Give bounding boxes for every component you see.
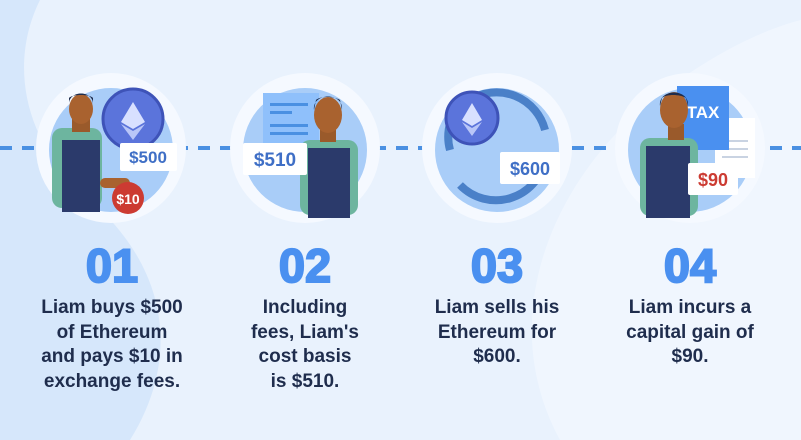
icon: cycle arrows	[448, 92, 545, 200]
text: step 4: capital gain of	[626, 322, 755, 343]
text: step 3	[435, 297, 559, 367]
icon: document	[263, 93, 319, 153]
price tag $90	[688, 163, 738, 195]
step 3 illustration	[422, 73, 572, 223]
text: step 4	[626, 297, 755, 367]
icon: documents	[715, 118, 755, 178]
icon: TAX sign	[677, 86, 729, 150]
fee badge $10	[112, 182, 144, 214]
step 4 illustration	[615, 73, 765, 223]
price tag $500: $500	[129, 148, 167, 167]
step number 03: 03	[471, 239, 523, 292]
icon: TAX sign: TAX	[687, 103, 720, 122]
step number 02: 02	[279, 239, 331, 292]
icon: ethereum coin	[103, 89, 163, 149]
text: step 1: and pays $10 in	[41, 346, 183, 367]
price tag $90: $90	[698, 170, 728, 190]
text: step 1: Liam buys $500	[41, 297, 183, 318]
text: step 2: cost basis	[259, 346, 351, 367]
person	[300, 96, 358, 218]
step number 04: 04	[664, 239, 716, 292]
text: step 3: Liam sells his	[435, 297, 559, 318]
text: step 1: exchange fees.	[44, 371, 180, 392]
text: step 1: of Ethereum	[57, 322, 167, 343]
text: step 2: Including	[263, 297, 347, 318]
price tag $510	[243, 143, 307, 175]
price tag $500	[120, 143, 177, 171]
step 1 illustration	[36, 73, 186, 223]
price tag $600: $600	[510, 159, 550, 179]
step 2 illustration	[230, 73, 380, 223]
fee badge $10: $10	[116, 191, 140, 207]
text: step 4: Liam incurs a	[629, 297, 752, 318]
text: step 3: Ethereum for	[438, 322, 557, 343]
text: step 3: $600.	[473, 346, 521, 367]
person	[640, 92, 698, 218]
text: step 2	[251, 297, 359, 392]
icon: ethereum coin	[446, 92, 498, 144]
dashed timeline	[0, 146, 801, 150]
person	[52, 94, 130, 212]
price tag $600	[500, 152, 560, 184]
step number 01: 01	[86, 239, 138, 292]
text: step 2: fees, Liam's	[251, 322, 359, 343]
text: step 4: $90.	[672, 346, 708, 367]
text: step 2: is $510.	[271, 371, 339, 392]
text: step 1	[41, 297, 183, 392]
price tag $510: $510	[254, 150, 296, 171]
